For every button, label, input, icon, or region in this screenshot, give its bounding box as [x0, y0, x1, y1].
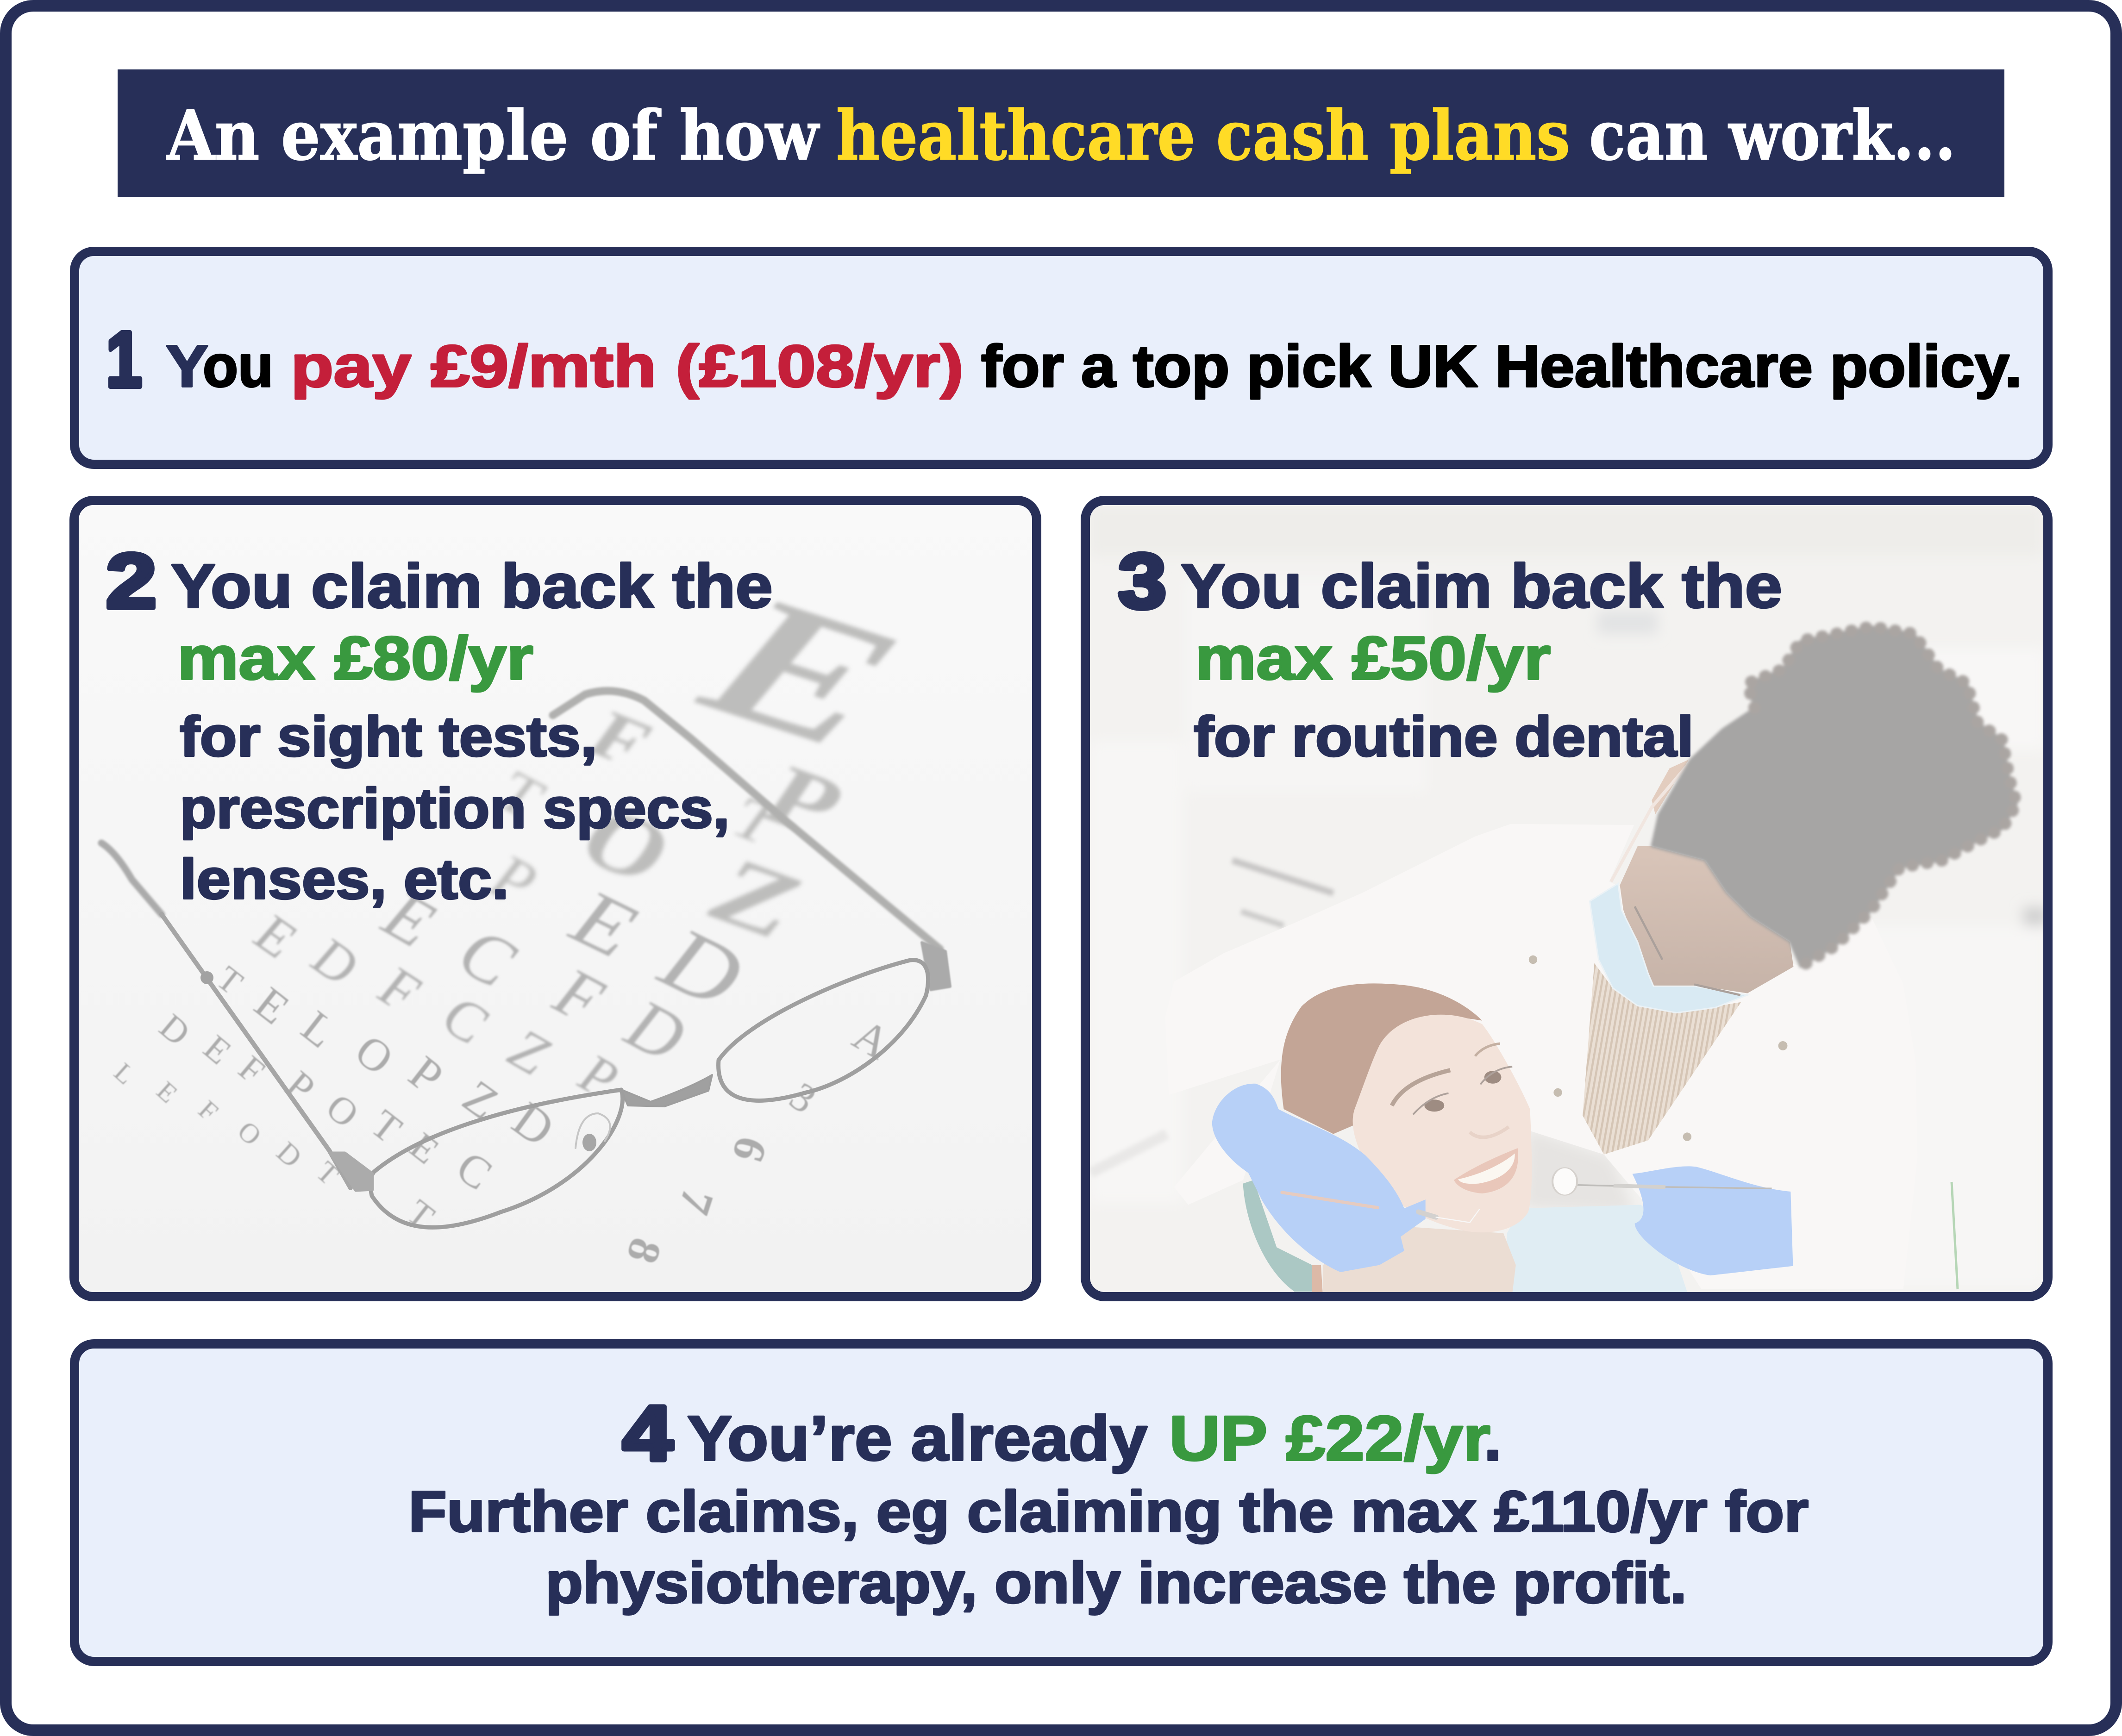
- step number 2: 2: [106, 537, 156, 624]
- dentist face: [1620, 846, 1793, 993]
- step 2 text: max £80/yr: [177, 624, 533, 692]
- eye chart letters: T: [400, 1192, 442, 1237]
- dentist hair: [1652, 627, 2017, 967]
- eye chart letters: D: [639, 913, 768, 1025]
- patient chair: [1243, 1180, 1312, 1292]
- step 4 detail text: physiotherapy, only increase the profit.: [545, 1551, 1687, 1615]
- eye chart letters: E: [242, 904, 310, 969]
- eye chart letters: P: [745, 748, 862, 854]
- eye chart letters: D: [502, 1092, 564, 1157]
- surgery background: [1090, 505, 2047, 1287]
- dental mirror: [1552, 1168, 1772, 1195]
- eye chart letters: F: [575, 698, 666, 780]
- eye chart letters: 8: [617, 1232, 671, 1269]
- surgery drawer handles: [1090, 861, 1333, 1173]
- eye chart letters: L: [108, 1057, 141, 1090]
- step 2 text: for sight tests,: [180, 705, 597, 768]
- eye chart letters: Z: [689, 839, 824, 957]
- eye chart letters: A: [845, 1010, 898, 1069]
- dental probe: [1282, 1193, 1479, 1223]
- face mask: [1590, 883, 1747, 1013]
- eye chart letters: P: [476, 843, 552, 918]
- left glove: [1212, 1084, 1426, 1272]
- patient smile: [1454, 1148, 1518, 1193]
- eye chart letters: 7: [669, 1183, 723, 1220]
- eye chart letters: E: [196, 1027, 239, 1072]
- eye chart letters: C: [442, 915, 535, 1001]
- plant stem: [1952, 1182, 1958, 1289]
- eye chart letters: T: [310, 1155, 345, 1191]
- step 2 text: lenses, etc.: [180, 848, 509, 911]
- eye chart letters: O: [318, 1085, 367, 1136]
- eye chart letters: F: [366, 956, 433, 1024]
- eye chart letters: P: [277, 1062, 323, 1112]
- eye chart letters: O: [232, 1115, 267, 1151]
- right temple arm: [553, 691, 950, 990]
- step 3 text: You claim back the: [1181, 552, 1782, 621]
- step 2 text: You claim back the: [171, 552, 773, 621]
- step 1 text: [166, 333, 2022, 400]
- right lens: [719, 960, 928, 1100]
- eye chart letters: E: [245, 978, 298, 1034]
- eye chart letters: F: [231, 1048, 273, 1091]
- eye chart letters: O: [346, 1025, 402, 1085]
- eye chart letters: C: [447, 1142, 501, 1200]
- patient neck: [1323, 1226, 1516, 1293]
- panel: step 2 sight tests: [69, 496, 1041, 1301]
- step 1 text: ou: [203, 333, 273, 400]
- eye chart letters: F: [538, 956, 620, 1036]
- step number 1: 1: [106, 316, 142, 404]
- eye chart letters: C: [429, 985, 502, 1056]
- bridge: [621, 1075, 712, 1106]
- eye chart letters: [108, 565, 946, 1269]
- step 2 text: prescription specs,: [180, 777, 730, 840]
- eye chart letters: 3: [782, 1074, 824, 1122]
- dentist eyes: [1635, 906, 1740, 995]
- title banner: [118, 69, 2004, 197]
- eye chart letters: E: [367, 879, 454, 960]
- step 4 headline: You’re already: [687, 1403, 1147, 1474]
- eye chart letters: E: [151, 1075, 183, 1109]
- coat buttons: [1529, 955, 1787, 1141]
- left temple arm: [101, 843, 351, 1188]
- step 4 headline: UP £22/yr: [1169, 1403, 1490, 1474]
- step 1 text: for a top pick UK Healthcare policy.: [981, 333, 2022, 400]
- step 4 detail text: [408, 1480, 1809, 1615]
- nose pad: [576, 1113, 610, 1151]
- step 3 text: max £50/yr: [1195, 624, 1551, 692]
- eye chart letters: P: [566, 1045, 631, 1109]
- panel: step 1: [70, 247, 2053, 469]
- eye chart letters: F: [193, 1094, 224, 1127]
- step 4 headline: .: [1484, 1403, 1502, 1474]
- eye chart letters: T: [363, 1101, 410, 1152]
- panel: step 4: [70, 1339, 2053, 1666]
- dentist shirt: [1583, 963, 1741, 1155]
- eye chart letters: T: [209, 959, 250, 1002]
- eye chart letters: D: [300, 928, 372, 996]
- step 1 text: Y: [166, 333, 208, 400]
- photo: eye chart and glasses: [79, 505, 1032, 1292]
- patient eyes and brows: [1392, 1043, 1512, 1137]
- patient gown: [1503, 1205, 1688, 1293]
- right glove: [1633, 1166, 1793, 1275]
- title text: healthcare cash plans: [836, 95, 1570, 175]
- glasses: [101, 691, 950, 1227]
- step number 4: 4: [623, 1390, 673, 1477]
- step 1 text: pay £9/mth (£108/yr): [291, 333, 964, 400]
- eye chart letters: O: [562, 789, 691, 901]
- eye chart letters: L: [292, 1001, 345, 1058]
- panel: step 3 routine dental: [1081, 496, 2053, 1301]
- step number 3: 3: [1118, 537, 1166, 624]
- eye chart letters: E: [552, 876, 659, 973]
- title text: [166, 95, 1956, 175]
- eye chart letters: 6: [722, 1131, 777, 1168]
- title text: An example of how: [166, 95, 820, 175]
- step 4 detail text: Further claims, eg claiming the max £110/yr for: [408, 1480, 1809, 1544]
- title text: can work...: [1589, 95, 1956, 175]
- step 2 text: [171, 552, 773, 911]
- eye chart letters: P: [399, 1046, 453, 1104]
- dentist coat: [1165, 824, 1917, 1289]
- patient hair: [1281, 983, 1482, 1293]
- patient face: [1353, 1015, 1532, 1232]
- photo: dentist and patient: [1090, 505, 2043, 1292]
- eye chart letters: D: [270, 1135, 308, 1174]
- step 3 text: for routine dental: [1194, 705, 1694, 768]
- eye chart letters: E: [402, 1124, 447, 1172]
- eye chart letters: T: [483, 760, 557, 830]
- eye chart letters: T: [717, 786, 796, 857]
- left lens: [370, 1090, 623, 1227]
- lower hinge: [330, 1153, 373, 1191]
- eye chart letters: E: [662, 565, 946, 780]
- dentist ear and mask strap: [1611, 760, 1691, 882]
- eye chart letters: Z: [495, 1018, 565, 1087]
- step 4 headline: [687, 1403, 1502, 1474]
- eye chart letters: Z: [453, 1070, 508, 1130]
- step 3 text: [1181, 552, 1782, 768]
- eye chart letters: D: [152, 1006, 198, 1053]
- eye chart letters: D: [609, 987, 705, 1075]
